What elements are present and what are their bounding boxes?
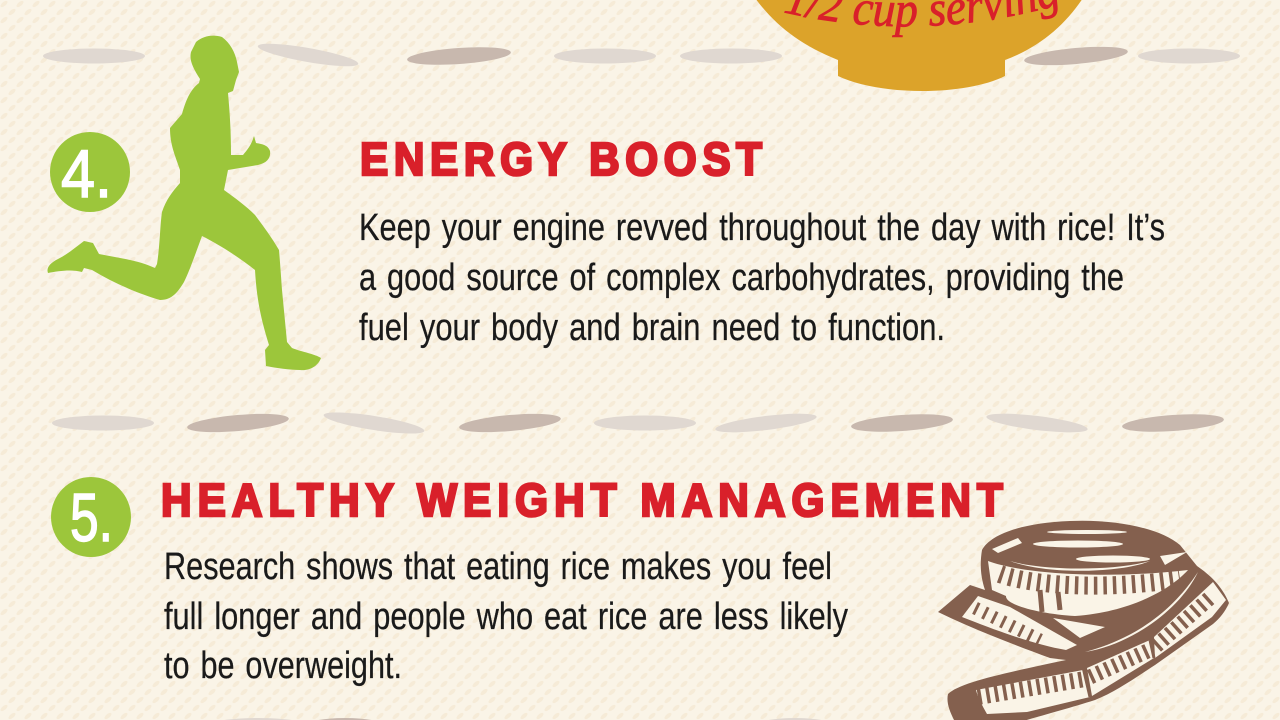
badge: number 5: 5. — [70, 480, 113, 556]
bowl with serving size label — [756, 0, 1082, 91]
rice grain divider: bottom, cropped — [207, 718, 835, 720]
heading: Healthy Weight Management: HEALTHY WEIGHT MANAGEMENT — [161, 475, 1003, 526]
heading: Energy Boost: ENERGY BOOST — [360, 134, 762, 185]
icon: measuring tape — [938, 521, 1229, 720]
badge: number 4 — [50, 132, 130, 212]
badge: number 4: 4. — [61, 136, 112, 212]
icon: green runner silhouette — [47, 36, 321, 370]
text block: weight management description: to be overweight. — [164, 645, 402, 687]
text block: energy boost description — [359, 207, 1165, 349]
text block: weight management description: full longer and people who eat rice are less likely — [164, 596, 848, 638]
text block: energy boost description: fuel your body and brain need to function. — [359, 307, 945, 349]
badge: number 5 — [51, 477, 131, 557]
rice grain divider: middle — [52, 408, 1224, 438]
text block: weight management description: Research shows that eating rice makes you feel — [164, 546, 832, 588]
text block: weight management description — [164, 546, 848, 687]
tape tick marks — [975, 574, 1212, 697]
coil highlights — [962, 530, 1226, 714]
text block: energy boost description: a good source of complex carbohydrates, providing the — [359, 257, 1124, 299]
rice grain divider: top — [43, 39, 1240, 71]
